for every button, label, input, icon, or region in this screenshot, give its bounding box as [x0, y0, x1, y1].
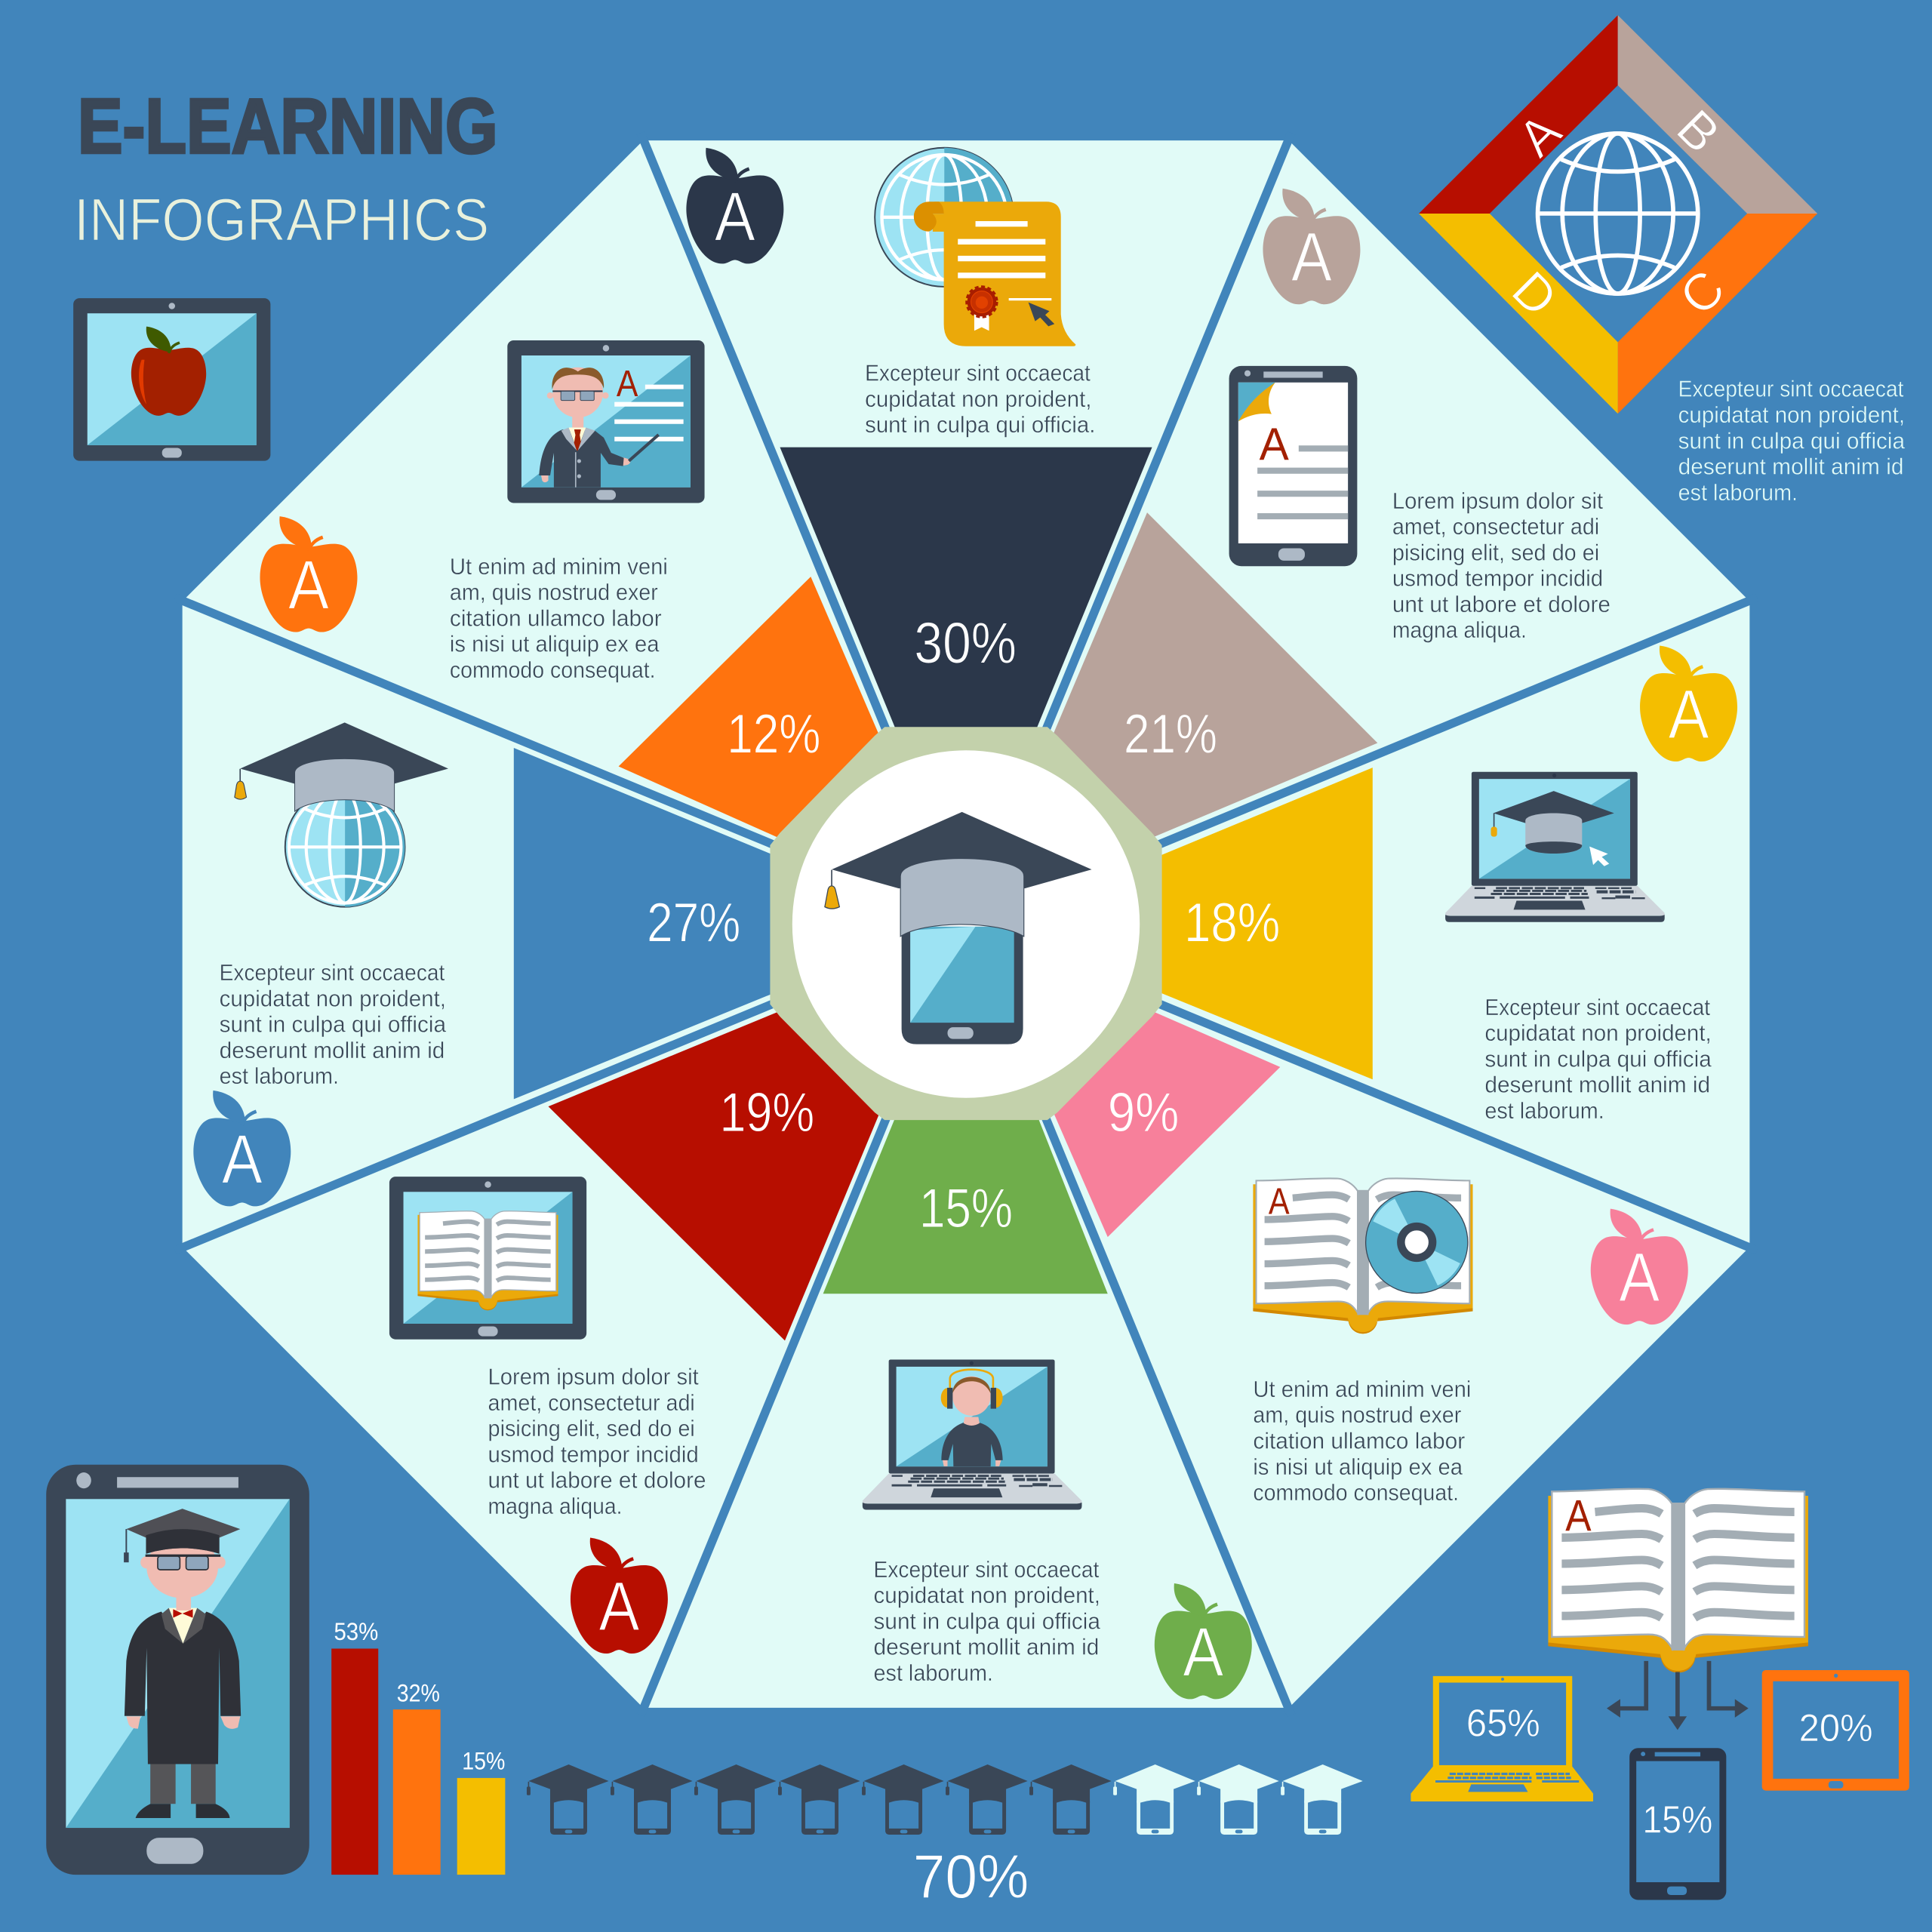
- text block: right: [1484, 995, 1712, 1124]
- text block: left: [220, 961, 446, 1089]
- title: INFOGRAPHICS: [74, 186, 489, 253]
- icon: apple orange: A: [288, 547, 329, 624]
- text block: upper left: Ut enim ad minim veni: [450, 555, 668, 580]
- text block: upper right: unt ut labore et dolore: [1392, 592, 1611, 617]
- chart: segment 18%: 18%: [1184, 891, 1280, 953]
- chart: segment 12%: 12%: [727, 703, 820, 765]
- text block: bottom: deserunt mollit anim id: [874, 1635, 1099, 1660]
- text block: lower right: Ut enim ad minim veni: [1253, 1377, 1471, 1402]
- text block: lower left: amet, consectetur adi: [488, 1391, 695, 1416]
- diagram: ABCD diamond with globe: D: [1501, 260, 1568, 328]
- icon: big open book: A: [1565, 1492, 1592, 1541]
- text block: top right: [1678, 377, 1905, 506]
- text block: bottom: [874, 1558, 1100, 1686]
- text block: upper right: [1392, 489, 1611, 643]
- text block: top: Excepteur sint occaecat: [865, 361, 1091, 386]
- text block: top right: Excepteur sint occaecat: [1678, 377, 1904, 402]
- icon: big open book: [1548, 1489, 1808, 1672]
- device: phone 15%: 15%: [1642, 1798, 1712, 1841]
- chart: segment 30%: 30%: [914, 611, 1017, 675]
- panel: octagon: [175, 133, 1757, 1715]
- icon: apple pink: A: [1619, 1239, 1660, 1316]
- icon: tablet with teacher: A: [617, 364, 638, 405]
- text block: left: cupidatat non proident,: [220, 986, 446, 1011]
- icon: laptop with cap: [1445, 772, 1665, 922]
- icon: apple pink: [1591, 1209, 1688, 1324]
- chart: segment 21%: 21%: [1124, 703, 1217, 765]
- text block: upper right: usmod tempor incidid: [1392, 567, 1603, 592]
- stat: 70%: 70%: [913, 1842, 1029, 1911]
- icon: apple green: A: [1183, 1614, 1223, 1690]
- device: tablet 20%: 20%: [1799, 1706, 1873, 1749]
- chart: segment 19%: [549, 1011, 880, 1340]
- text block: right: sunt in culpa qui officia: [1484, 1047, 1712, 1072]
- text block: upper right: magna aliqua.: [1392, 618, 1527, 643]
- device: laptop 65%: 65%: [1466, 1700, 1540, 1744]
- chart: segment 27%: [514, 748, 774, 1099]
- text block: top right: sunt in culpa qui officia: [1678, 429, 1905, 454]
- icon: tablet with teacher: [507, 340, 705, 503]
- text block: bottom: cupidatat non proident,: [874, 1583, 1100, 1608]
- device: laptop 65%: [1411, 1676, 1593, 1801]
- text block: left: sunt in culpa qui officia: [220, 1013, 446, 1038]
- text block: upper left: am, quis nostrud exer: [450, 580, 658, 605]
- icon: phone with document: [1229, 366, 1357, 566]
- text block: upper left: commodo consequat.: [450, 658, 656, 683]
- chart: segment 9%: 9%: [1108, 1081, 1179, 1143]
- icon: cap on globe: [235, 722, 448, 907]
- icon: phone with document: A: [1260, 418, 1289, 469]
- icon: book with disc: [1253, 1178, 1473, 1334]
- bar chart: 32%: [397, 1679, 440, 1707]
- text block: upper left: is nisi ut aliquip ex ea: [450, 632, 660, 657]
- title: [74, 82, 498, 253]
- text block: lower left: magna aliqua.: [488, 1494, 622, 1519]
- text block: upper right: amet, consectetur adi: [1392, 515, 1599, 540]
- chart: segment 9%: [1054, 1011, 1280, 1237]
- diagram: ABCD diamond with globe: [1419, 15, 1817, 414]
- chart: segment 18%: [1158, 768, 1373, 1079]
- icon: apple green: [1155, 1583, 1252, 1699]
- bar chart: [331, 1617, 505, 1875]
- chart: segment 15%: 15%: [919, 1177, 1013, 1239]
- icon: tablet with red apple: [73, 298, 270, 461]
- text block: bottom: est laborum.: [874, 1661, 993, 1686]
- icon: apple taupe: [1263, 189, 1360, 304]
- chart: segment 19%: 19%: [719, 1081, 814, 1143]
- icon: globe and certificate: [875, 148, 1075, 346]
- text block: top right: deserunt mollit anim id: [1678, 455, 1903, 480]
- text block: lower right: is nisi ut aliquip ex ea: [1253, 1455, 1463, 1480]
- arrows: [1607, 1661, 1749, 1730]
- icon: apple taupe: A: [1291, 219, 1332, 296]
- text block: right: est laborum.: [1484, 1099, 1604, 1124]
- text block: bottom: Excepteur sint occaecat: [874, 1558, 1100, 1583]
- text block: right: cupidatat non proident,: [1484, 1021, 1712, 1046]
- text block: lower right: am, quis nostrud exer: [1253, 1403, 1461, 1428]
- text block: top: sunt in culpa qui officia.: [865, 413, 1095, 438]
- text block: upper left: citation ullamco labor: [450, 606, 662, 631]
- icon: apple navy: [686, 148, 783, 263]
- text block: upper right: Lorem ipsum dolor sit: [1392, 489, 1604, 514]
- chart: segment 12%: [619, 577, 881, 838]
- icon: tablet with book: [389, 1177, 586, 1340]
- icon: apple blue: A: [222, 1121, 263, 1198]
- text block: left: est laborum.: [220, 1064, 339, 1089]
- text block: right: deserunt mollit anim id: [1484, 1073, 1710, 1098]
- text block: left: deserunt mollit anim id: [220, 1038, 445, 1063]
- text block: upper left: [450, 555, 668, 683]
- text block: lower right: [1253, 1377, 1471, 1506]
- text block: lower right: commodo consequat.: [1253, 1481, 1459, 1506]
- icon: book with disc: A: [1269, 1182, 1290, 1223]
- icon: apple blue: [193, 1091, 291, 1206]
- text block: top right: est laborum.: [1678, 481, 1798, 506]
- text block: right: Excepteur sint occaecat: [1484, 995, 1711, 1020]
- text block: lower left: pisicing elit, sed do ei: [488, 1417, 695, 1441]
- center badge: cap and phone: [770, 727, 1162, 1120]
- text block: lower left: Lorem ipsum dolor sit: [488, 1365, 699, 1390]
- text block: top: [865, 361, 1095, 438]
- text block: lower left: [488, 1365, 706, 1519]
- text block: bottom: sunt in culpa qui officia: [874, 1609, 1100, 1634]
- chart: segment 21%: [1051, 512, 1377, 837]
- icon: apple red: [571, 1538, 668, 1654]
- text block: left: Excepteur sint occaecat: [220, 961, 445, 986]
- title: E-LEARNING: [78, 82, 498, 169]
- icon: apple yellow: A: [1669, 676, 1709, 753]
- icon: apple red: A: [598, 1568, 639, 1645]
- icon: laptop with student: [863, 1359, 1081, 1509]
- diagram: ABCD diamond with globe: C: [1669, 259, 1736, 326]
- diagram: ABCD diamond with globe: A: [1506, 102, 1572, 168]
- text block: top right: cupidatat non proident,: [1678, 403, 1905, 428]
- diagram: ABCD diamond with globe: B: [1666, 98, 1731, 164]
- text block: lower left: usmod tempor incidid: [488, 1442, 699, 1467]
- text block: lower right: citation ullamco labor: [1253, 1429, 1465, 1454]
- icon: apple yellow: [1640, 646, 1737, 761]
- text block: lower left: unt ut labore et dolore: [488, 1469, 706, 1494]
- device: tablet 20%: [1762, 1670, 1909, 1791]
- icon: apple navy: A: [715, 178, 755, 255]
- bar chart: 15%: [462, 1746, 505, 1774]
- device: phone 15%: [1629, 1748, 1726, 1900]
- bar chart: 53%: [334, 1617, 378, 1645]
- text block: top: cupidatat non proident,: [865, 387, 1092, 412]
- icon: apple orange: [260, 516, 357, 632]
- chart: segment 15%: [823, 1116, 1108, 1294]
- icon: phone with graduate: [46, 1465, 309, 1875]
- chart: segment 27%: 27%: [647, 891, 740, 953]
- pictogram row: caps: [527, 1764, 1363, 1835]
- chart: segment 30%: [780, 448, 1152, 730]
- text block: upper right: pisicing elit, sed do ei: [1392, 540, 1599, 565]
